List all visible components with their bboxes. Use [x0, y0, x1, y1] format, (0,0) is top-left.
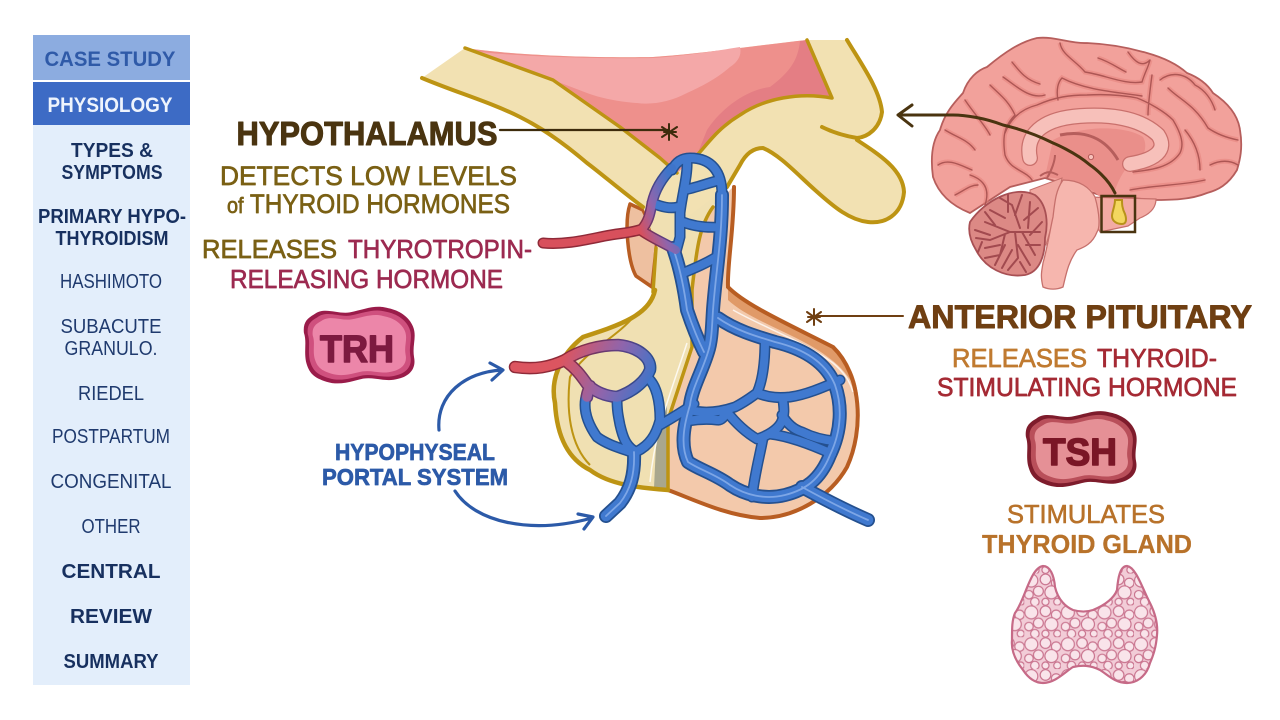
menu item: central: CENTRAL [62, 561, 160, 583]
menu item: review: REVIEW [70, 606, 152, 628]
label: hypophyseal portal system: PORTAL SYSTEM [322, 464, 508, 490]
menu item: primary hypothyroidism: PRIMARY HYPO- [38, 206, 186, 228]
cerebellum [969, 192, 1047, 276]
illustration: sagittal brain [932, 38, 1241, 289]
menu item: physiology active: PHYSIOLOGY [48, 94, 172, 117]
text: releases TRH: THYROTROPIN- [348, 234, 532, 264]
anterior pituitary tissue [668, 187, 858, 518]
text: releases TSH: THYROID- [1097, 343, 1217, 373]
text: stimulates thyroid gland [982, 499, 1192, 559]
label: hypophyseal portal system: HYPOPHYSEAL [335, 439, 495, 465]
menu item: case study: CASE STUDY [44, 48, 176, 71]
label: hypothalamus [236, 115, 677, 152]
menu item: hashimoto: HASHIMOTO [60, 271, 162, 293]
menu item: summary: SUMMARY [64, 651, 159, 673]
lower capillary artery [515, 345, 650, 397]
badge: TRH [304, 307, 415, 383]
text: detects low levels: DETECTS LOW LEVELS [220, 161, 517, 191]
sidebar navigation [33, 35, 190, 685]
badge: TRH: TRH [320, 329, 394, 371]
hypophyseal portal vessels [515, 158, 868, 520]
corpus callosum and midbrain [1029, 116, 1161, 197]
menu item: types and symptoms: TYPES & [71, 140, 153, 162]
text: releases TSH: RELEASES [952, 343, 1087, 373]
badge: TSH [1026, 411, 1137, 487]
menu item: physiology active [33, 82, 190, 125]
text: stimulates thyroid gland: THYROID GLAND [982, 529, 1192, 559]
cerebrum [932, 38, 1241, 213]
menu item: primary hypothyroidism: THYROIDISM [56, 228, 168, 250]
upper capillary artery [543, 168, 676, 250]
menu item: types and symptoms [62, 140, 162, 184]
cerebellar peduncle [1030, 178, 1062, 245]
text: releases TRH: RELEASING HORMONE [230, 264, 503, 294]
leader line to anterior pituitary [807, 309, 903, 325]
menu item: postpartum: POSTPARTUM [52, 426, 170, 448]
badge: TSH: TSH [1043, 432, 1117, 474]
menu item: types and symptoms: SYMPTOMS [62, 162, 162, 184]
text: releases TRH [202, 234, 532, 294]
text: releases TSH [937, 343, 1237, 402]
menu item: subacute granulomatous: SUBACUTE [60, 316, 162, 338]
sidebar background panel [33, 125, 190, 685]
menu item: subacute granulomatous: GRANULO. [64, 338, 158, 360]
diagram: hypothalamus and pituitary anatomy [422, 40, 904, 520]
leader line to hypothalamus [500, 124, 677, 140]
vessel outlines [515, 158, 868, 520]
illustration: thyroid gland [1012, 566, 1157, 683]
posterior pituitary tissue [554, 150, 730, 490]
menu item: primary hypothyroidism [38, 206, 186, 250]
text: stimulates thyroid gland: STIMULATES [1007, 499, 1165, 529]
brainstem [1041, 180, 1099, 289]
label: hypophyseal portal system [322, 439, 508, 490]
text: releases TSH: STIMULATING HORMONE [937, 372, 1237, 402]
menu item: congenital: CONGENITAL [50, 471, 172, 493]
highlighted pituitary region [1102, 196, 1135, 232]
menu item: subacute granulomatous [60, 316, 162, 360]
label: anterior pituitary: ANTERIOR PITUITARY [908, 299, 1252, 335]
text: releases TRH: RELEASES [202, 234, 337, 264]
label: hypothalamus: HYPOTHALAMUS [236, 115, 498, 152]
arrow: to upper vessels [439, 363, 503, 430]
menu item: riedel: RIEDEL [78, 383, 144, 405]
menu item: other: OTHER [82, 516, 140, 538]
text: detects low levels [220, 161, 517, 219]
lower frontal and hypothalamic tissue [1088, 197, 1156, 232]
text: detects low levels: of THYROID HORMONES [227, 189, 510, 219]
hypothalamus tissue [422, 40, 904, 222]
menu item: case study [33, 35, 190, 80]
pars tuberalis [627, 204, 657, 287]
arrow: brain to diagram [898, 105, 1115, 193]
arrow: to lower vessels [455, 491, 593, 529]
